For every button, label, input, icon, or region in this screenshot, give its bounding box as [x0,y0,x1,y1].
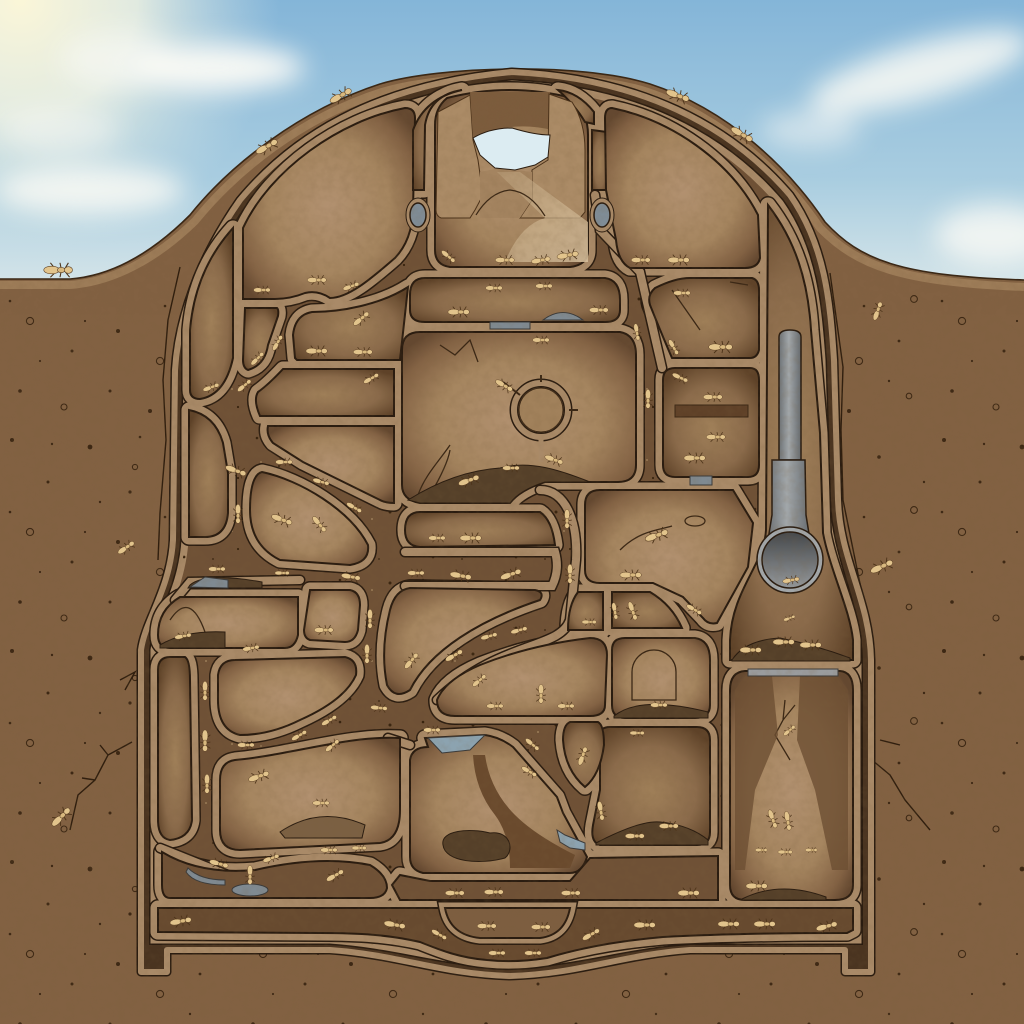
connecting tunnel walls [160,195,662,880]
dirt mounds [160,465,850,900]
chamber: small left [243,308,278,370]
vent: right [592,130,608,190]
chamber: bottom left low [162,852,387,898]
chamber: lower right [592,727,710,845]
chamber: right middle [663,368,759,477]
chamber: top-left dome [243,108,415,299]
chamber: centre large [402,332,636,503]
shaft: sky hole [473,128,550,170]
central hub ring [503,375,578,462]
chamber walls: tan band [158,90,853,961]
chamber: curved centre [384,588,542,694]
chamber: left slim upper [190,228,233,399]
ants [44,85,895,957]
soil grain texture [70,70,916,1014]
chambers [158,90,853,961]
chamber: left stack top [293,287,408,360]
inspection ports [406,198,614,232]
divider band in right chamber [675,405,748,417]
chamber: left slim bottom [158,657,192,840]
chamber: left stack lower [268,426,394,503]
chamber: lower centre wedge [437,638,607,716]
chamber: small square [304,590,360,642]
chamber: left stack middle [256,369,394,416]
chamber: right upper [649,278,759,358]
vent: right upper crescent [558,90,594,124]
chamber: bottom right tall [730,671,853,900]
chamber: bottom pod [445,908,570,938]
chamber walls: dark outline [158,90,853,961]
soil cracks [70,267,930,830]
chamber: small oval [563,722,604,787]
dark band inside bottom centre chamber [473,755,575,868]
chamber: centre band [405,512,555,547]
dark columns in bottom right chamber [735,676,848,870]
chamber: right centre [585,490,753,623]
chamber: small pair left [568,592,603,630]
sky [0,0,1024,300]
chamber: bottom right low [392,856,718,900]
chamber: small pair right [612,592,682,628]
chamber: lower left [220,738,400,850]
chamber: top centre shaft [435,90,588,267]
chamber: fungus room [612,638,710,718]
shaft: rock and light beam [436,92,588,262]
chamber: right pipe shaft [730,205,853,660]
chamber: left slim lower [189,410,228,537]
chamber: centre top [410,278,620,322]
chamber: wide left [158,597,298,648]
vent: left crescent [413,90,462,190]
pipe [757,330,823,593]
internal cracks and debris lines [170,282,795,760]
chamber: top-right dome [605,108,760,268]
chamber: oval left [218,657,356,735]
grey stones [186,312,838,896]
outer wall of the mound [136,68,876,980]
chamber: bottom band [158,908,853,961]
chamber: bottom centre [410,735,587,873]
chamber: leaf oval [250,472,368,565]
